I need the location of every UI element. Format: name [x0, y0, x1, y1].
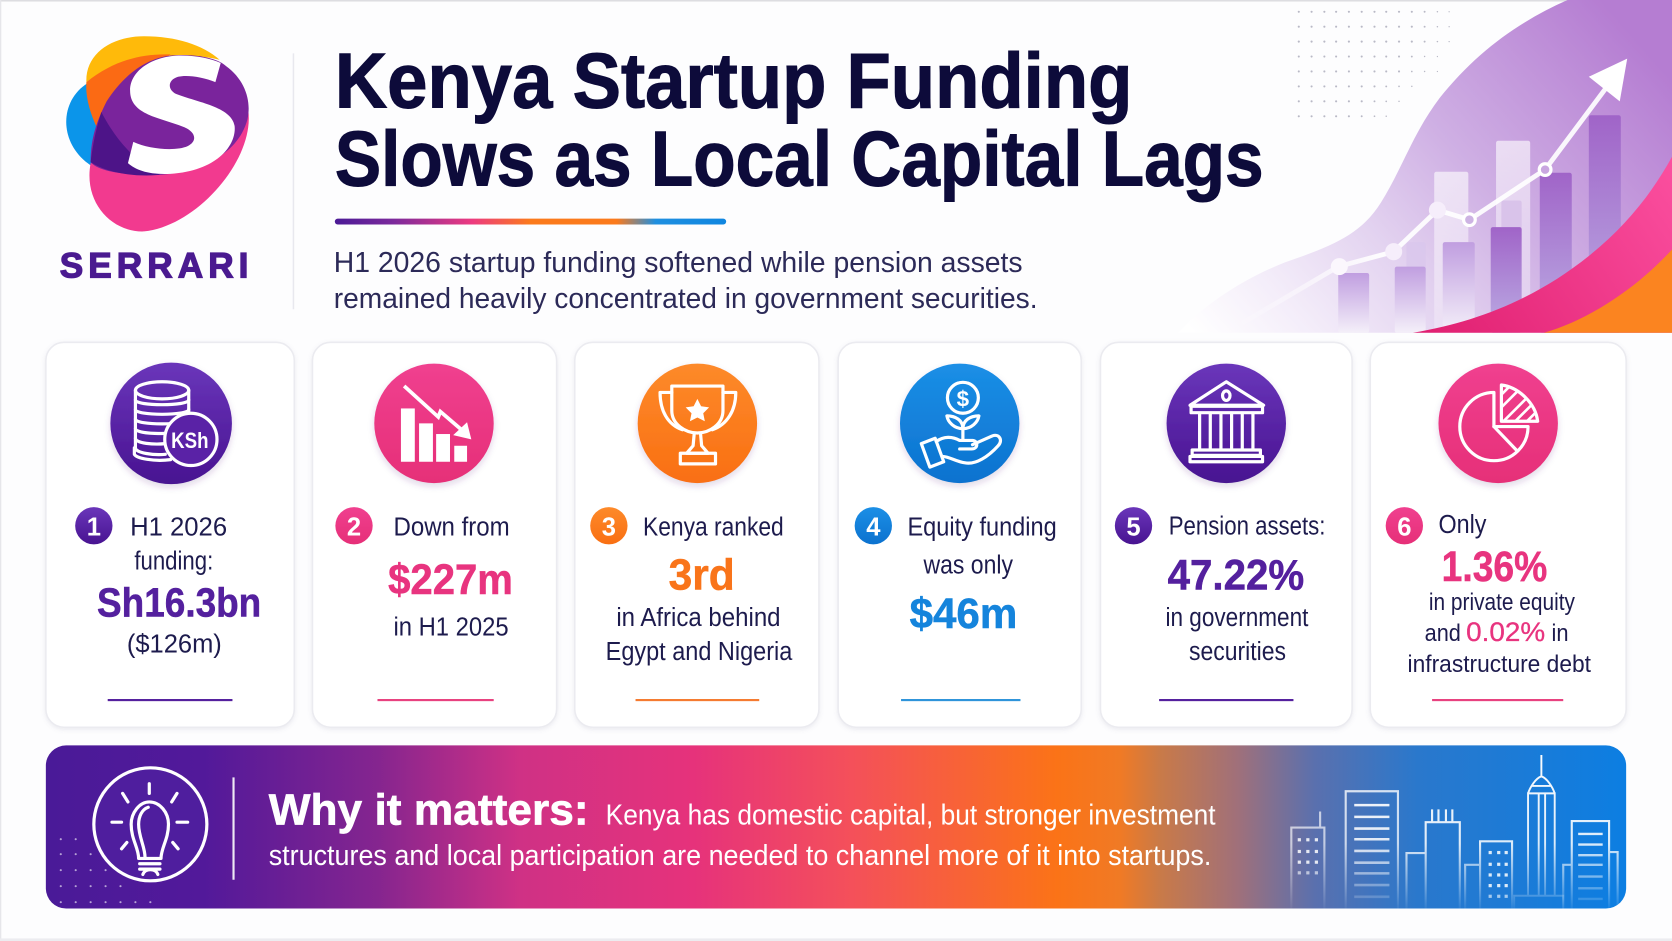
card 1 text: ($126m) [127, 631, 222, 659]
badge 5: 5 [1126, 513, 1141, 541]
card 6 text: and [1425, 620, 1461, 647]
card 5 text [1165, 512, 1325, 666]
panel: card 4 equity [838, 342, 1081, 727]
card 5 text: securities [1189, 638, 1286, 666]
title: Kenya Startup Funding [335, 39, 1132, 125]
subtitle: remained heavily concentrated in government securities. [334, 283, 1038, 315]
badge 1: 1 [87, 513, 101, 541]
logo wordmark: SERRARI [60, 246, 248, 285]
badge 4 [855, 507, 892, 544]
title gradient underline [335, 219, 726, 224]
icon: coin stack with KSh [110, 363, 232, 484]
subtitle [334, 247, 1038, 315]
icon: light bulb [94, 768, 207, 881]
card 1 text: Sh16.3bn [97, 579, 261, 625]
card 2 text: $227m [388, 556, 513, 604]
orange swoosh [1544, 250, 1672, 333]
wave background [1178, 0, 1672, 333]
illustration: city skyline [1291, 755, 1618, 909]
card 1 text: funding: [134, 547, 213, 575]
title [335, 39, 1264, 203]
panel: why it matters banner [46, 745, 1626, 909]
banner text: structures and local participation are needed to channel more of it into startups. [269, 840, 1211, 872]
icon: pie chart [1438, 364, 1558, 483]
badge 1 [75, 507, 112, 544]
card 6 text: Only [1438, 511, 1487, 539]
badge 2: 2 [347, 513, 361, 541]
dot pattern [1298, 11, 1450, 117]
card 5 text: 47.22% [1168, 552, 1304, 600]
card 2 text: in H1 2025 [393, 614, 509, 642]
icon: coin stack with KSh: KSh [171, 428, 208, 453]
panel: card 6 allocation [1370, 342, 1626, 727]
card 1 text: H1 2026 [130, 513, 227, 541]
icon: falling bar chart [374, 364, 494, 483]
card 4 text: Equity funding [907, 513, 1057, 541]
panel: card 1 funding [46, 342, 294, 727]
card 6 text: in [1552, 620, 1569, 647]
panel: card 5 pension [1100, 342, 1352, 727]
card 1 text [97, 513, 261, 659]
card 5 text: in government [1165, 604, 1308, 632]
badge 5 [1115, 507, 1152, 544]
arrow: rising trend line [1242, 59, 1627, 323]
card 4 text [907, 513, 1057, 638]
logo: Serrari [60, 36, 249, 285]
card 6 text: 0.02% [1466, 617, 1545, 647]
card 5 text: Pension assets: [1169, 512, 1325, 540]
banner divider [232, 777, 235, 880]
card 2 text [388, 513, 513, 642]
badge 4: 4 [866, 513, 881, 541]
icon: hand with growing coin plant: $ [957, 386, 970, 411]
subtitle: H1 2026 startup funding softened while pension assets [334, 247, 1023, 279]
panel: card 2 decline [312, 342, 557, 727]
card 6 text: infrastructure debt [1408, 651, 1591, 678]
card 2 text: Down from [393, 513, 510, 541]
banner text: Kenya has domestic capital, but stronger investment [606, 799, 1216, 831]
banner text [269, 799, 1216, 872]
badge 3: 3 [602, 513, 616, 541]
icon: trophy [638, 364, 757, 483]
header divider [293, 53, 294, 309]
badge 2 [335, 507, 373, 544]
card 6 text: in private equity [1429, 589, 1575, 616]
bar chart [1338, 115, 1621, 333]
panel: card 3 ranking [575, 342, 819, 727]
card 3 text: in Africa behind [616, 604, 781, 632]
badge 6: 6 [1397, 513, 1411, 541]
banner heading: Why it matters: [269, 785, 589, 834]
icon: hand with growing coin plant [900, 364, 1019, 483]
pink swoosh [1413, 157, 1672, 333]
logo mark [66, 36, 249, 231]
card 4 text: $46m [910, 590, 1017, 638]
graphic: rising chart with wave [1178, 0, 1672, 333]
card 3 text: Kenya ranked [643, 513, 784, 541]
banner dot pattern [60, 838, 151, 903]
icon: bank building [1167, 364, 1286, 483]
card 3 text: 3rd [669, 551, 735, 600]
card 3 text [606, 513, 793, 666]
card 6 text: 1.36% [1442, 543, 1547, 591]
title: Slows as Local Capital Lags [335, 117, 1264, 203]
badge 3 [590, 507, 628, 544]
card 3 text: Egypt and Nigeria [606, 638, 793, 666]
card 4 text: was only [923, 552, 1013, 580]
card 6 text [1408, 511, 1591, 678]
badge 6 [1386, 507, 1423, 544]
